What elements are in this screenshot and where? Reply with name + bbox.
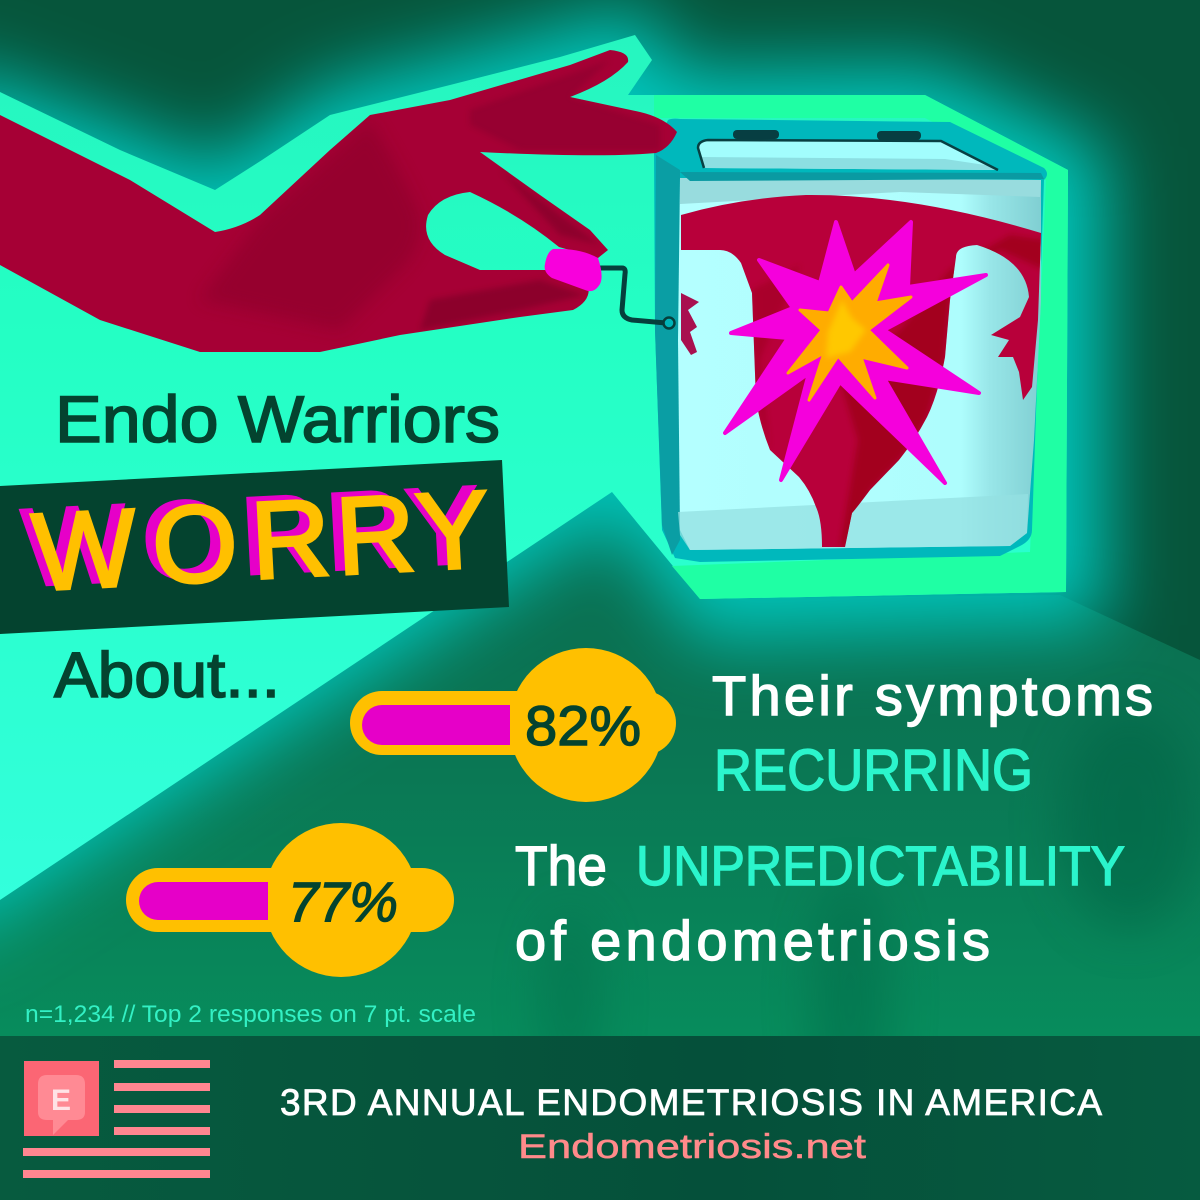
hand shading <box>200 60 660 330</box>
footer url: Endometriosis.net <box>518 1128 867 1166</box>
hand silhouette <box>0 50 677 352</box>
jar outer lime band <box>654 95 1068 599</box>
mint glow outline of hand, jar and light beam <box>0 35 1068 900</box>
bar fill <box>362 705 510 745</box>
footer title: 3RD ANNUAL ENDOMETRIOSIS IN AMERICA <box>280 1082 1102 1123</box>
jar teal body <box>654 119 1047 562</box>
heading: Endo Warriors: Endo Warriors <box>55 382 500 456</box>
WORRY yellow word: WORRY <box>29 468 492 614</box>
jar glass bottom shade <box>678 494 1028 550</box>
bar dial <box>264 823 418 977</box>
lid shading <box>701 157 998 170</box>
crank ring <box>664 318 674 328</box>
stat bar: 82% <box>350 648 676 802</box>
value 77%: 77% <box>288 870 398 933</box>
bar dial <box>509 648 663 802</box>
label line 1: Their symptoms <box>712 664 1153 727</box>
subheading: About: About... <box>54 639 280 711</box>
starburst: orange <box>788 265 911 400</box>
logo square <box>24 1061 99 1136</box>
banner background <box>0 460 509 634</box>
label: The unpredictability of endometriosis <box>515 834 1125 972</box>
label word The: The <box>515 834 607 897</box>
jar glass top shade <box>680 178 1041 204</box>
footnote: n=1,234 // Top 2 responses on 7 pt. scale <box>25 1001 476 1028</box>
logo: flag <box>23 1060 210 1178</box>
label word UNPREDICTABILITY: UNPREDICTABILITY <box>636 834 1125 897</box>
lid panel <box>698 140 998 170</box>
uterus body <box>681 195 1041 547</box>
crank knob <box>545 249 602 291</box>
uterus <box>681 195 1045 547</box>
starburst: yellow core <box>826 300 866 358</box>
label line 2: RECURRING <box>714 738 1033 803</box>
footer <box>0 1036 1200 1200</box>
logo speech bubble <box>38 1075 85 1135</box>
jar left shaded edge <box>655 155 680 555</box>
lid clips <box>733 130 779 139</box>
jar glass <box>678 178 1041 550</box>
jar lid <box>698 130 998 170</box>
WORRY magenta shadow: WORRY <box>19 463 482 610</box>
left fringe <box>681 293 699 355</box>
stat bar: 77% <box>126 823 454 977</box>
logo letter: E <box>51 1084 71 1117</box>
value 82%: 82% <box>525 694 641 757</box>
crank handle <box>545 249 674 328</box>
starburst: magenta <box>725 222 986 483</box>
teal glow around hand and jar <box>0 5 1105 950</box>
bar capsule <box>126 868 454 932</box>
jar <box>654 119 1047 562</box>
banner <box>0 460 509 634</box>
label: Their symptoms recurring <box>712 664 1153 803</box>
jar rim bottom line <box>680 172 1044 181</box>
background: green floor <box>0 530 1200 1036</box>
crank wire <box>594 268 666 323</box>
bar fill <box>139 882 268 920</box>
label line 2: of endometriosis <box>515 909 990 972</box>
lid outline <box>698 140 998 170</box>
uterus shade <box>752 235 1045 547</box>
bar capsule <box>350 691 676 755</box>
footer band <box>0 1036 1200 1200</box>
logo stripes <box>23 1060 210 1178</box>
hand <box>0 50 677 352</box>
